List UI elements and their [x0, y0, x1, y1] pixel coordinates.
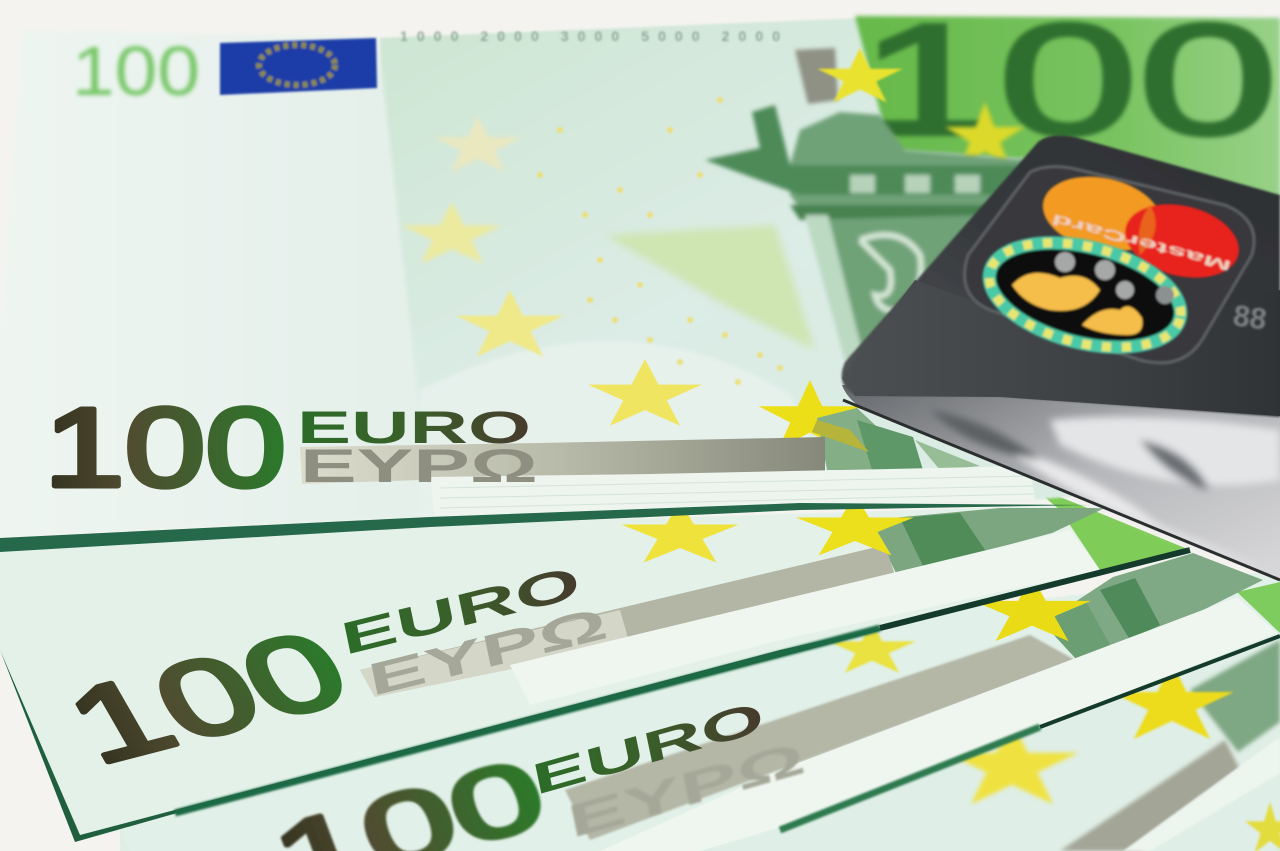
grey marbled texture: [930, 410, 1280, 570]
foil strip: [565, 635, 1075, 840]
foil strip: [360, 545, 895, 697]
icon: orange and red card logo circles: [1036, 166, 1247, 289]
denomination text: 100: [46, 609, 369, 787]
icon: EU flag: [220, 38, 377, 95]
green architecture bars: [870, 508, 1105, 575]
white striped band: [430, 466, 1035, 517]
green shadow line: [175, 628, 880, 813]
upper dark card face: [842, 135, 1280, 417]
star: [796, 494, 914, 556]
green architecture bars: [817, 408, 923, 470]
foil strip pale end: [360, 610, 630, 697]
dark shadow line under note: [880, 550, 1190, 628]
EURO text: EURO: [337, 556, 585, 665]
dark line: [1040, 636, 1280, 727]
embossed card digits: 88: [1231, 299, 1269, 337]
EYPO text: ΕΥΡΩ: [564, 732, 809, 848]
banknote 3: third layer: [120, 553, 1280, 851]
green architecture bars: [1043, 553, 1263, 660]
denomination text: 100: [44, 385, 286, 510]
pale star: [621, 501, 739, 563]
EYPO text: ΕΥΡΩ: [300, 439, 538, 492]
EYPO text: ΕΥΡΩ: [364, 597, 612, 706]
small top left 100: 100: [72, 32, 200, 110]
white left panel: [0, 30, 432, 537]
banknote 2: second layer: [0, 485, 1190, 842]
faded security circle: [420, 341, 830, 520]
star top centre: [945, 102, 1025, 167]
white striped band: [600, 597, 1277, 851]
card dark edge: [843, 400, 1280, 580]
shadow line: [780, 727, 1040, 830]
banknote 1: top layer: [0, 0, 1280, 552]
dark green shadow line: [0, 503, 1090, 552]
logo recess outline: [964, 166, 1254, 363]
star: [973, 576, 1091, 641]
white striped band: [510, 530, 1100, 705]
architecture: green portal: [705, 105, 1030, 360]
credit card: [842, 135, 1280, 580]
foil strip: [300, 437, 825, 484]
icon: hologram globe: [978, 225, 1192, 365]
left lower shadow edge: [0, 612, 950, 842]
bright green mesh: [1237, 582, 1280, 633]
green mesh: [1030, 485, 1190, 570]
top right green panel: [855, 16, 1280, 200]
main pale green note body: [380, 18, 1280, 518]
lower card body with grey picture: [842, 385, 1280, 580]
lighter speckled lower left area: [842, 280, 1280, 416]
grey foil patch top: [795, 48, 838, 104]
EURO text: EURO: [297, 402, 531, 453]
banknote 4: bottom layer: [120, 600, 1280, 851]
halftone green triangle: [605, 225, 815, 350]
note body: [120, 570, 1280, 851]
icon: orange and red card logo circles: MasterCard: [1050, 211, 1233, 275]
stars: [402, 116, 861, 449]
faint top serial text: 1000 2000 3000 5000 2000: [400, 28, 780, 44]
small yellow dots: [537, 97, 783, 385]
faded star: [828, 622, 916, 673]
note body: [0, 505, 1190, 842]
EURO text: EURO: [528, 693, 768, 805]
star top right: [817, 48, 903, 102]
